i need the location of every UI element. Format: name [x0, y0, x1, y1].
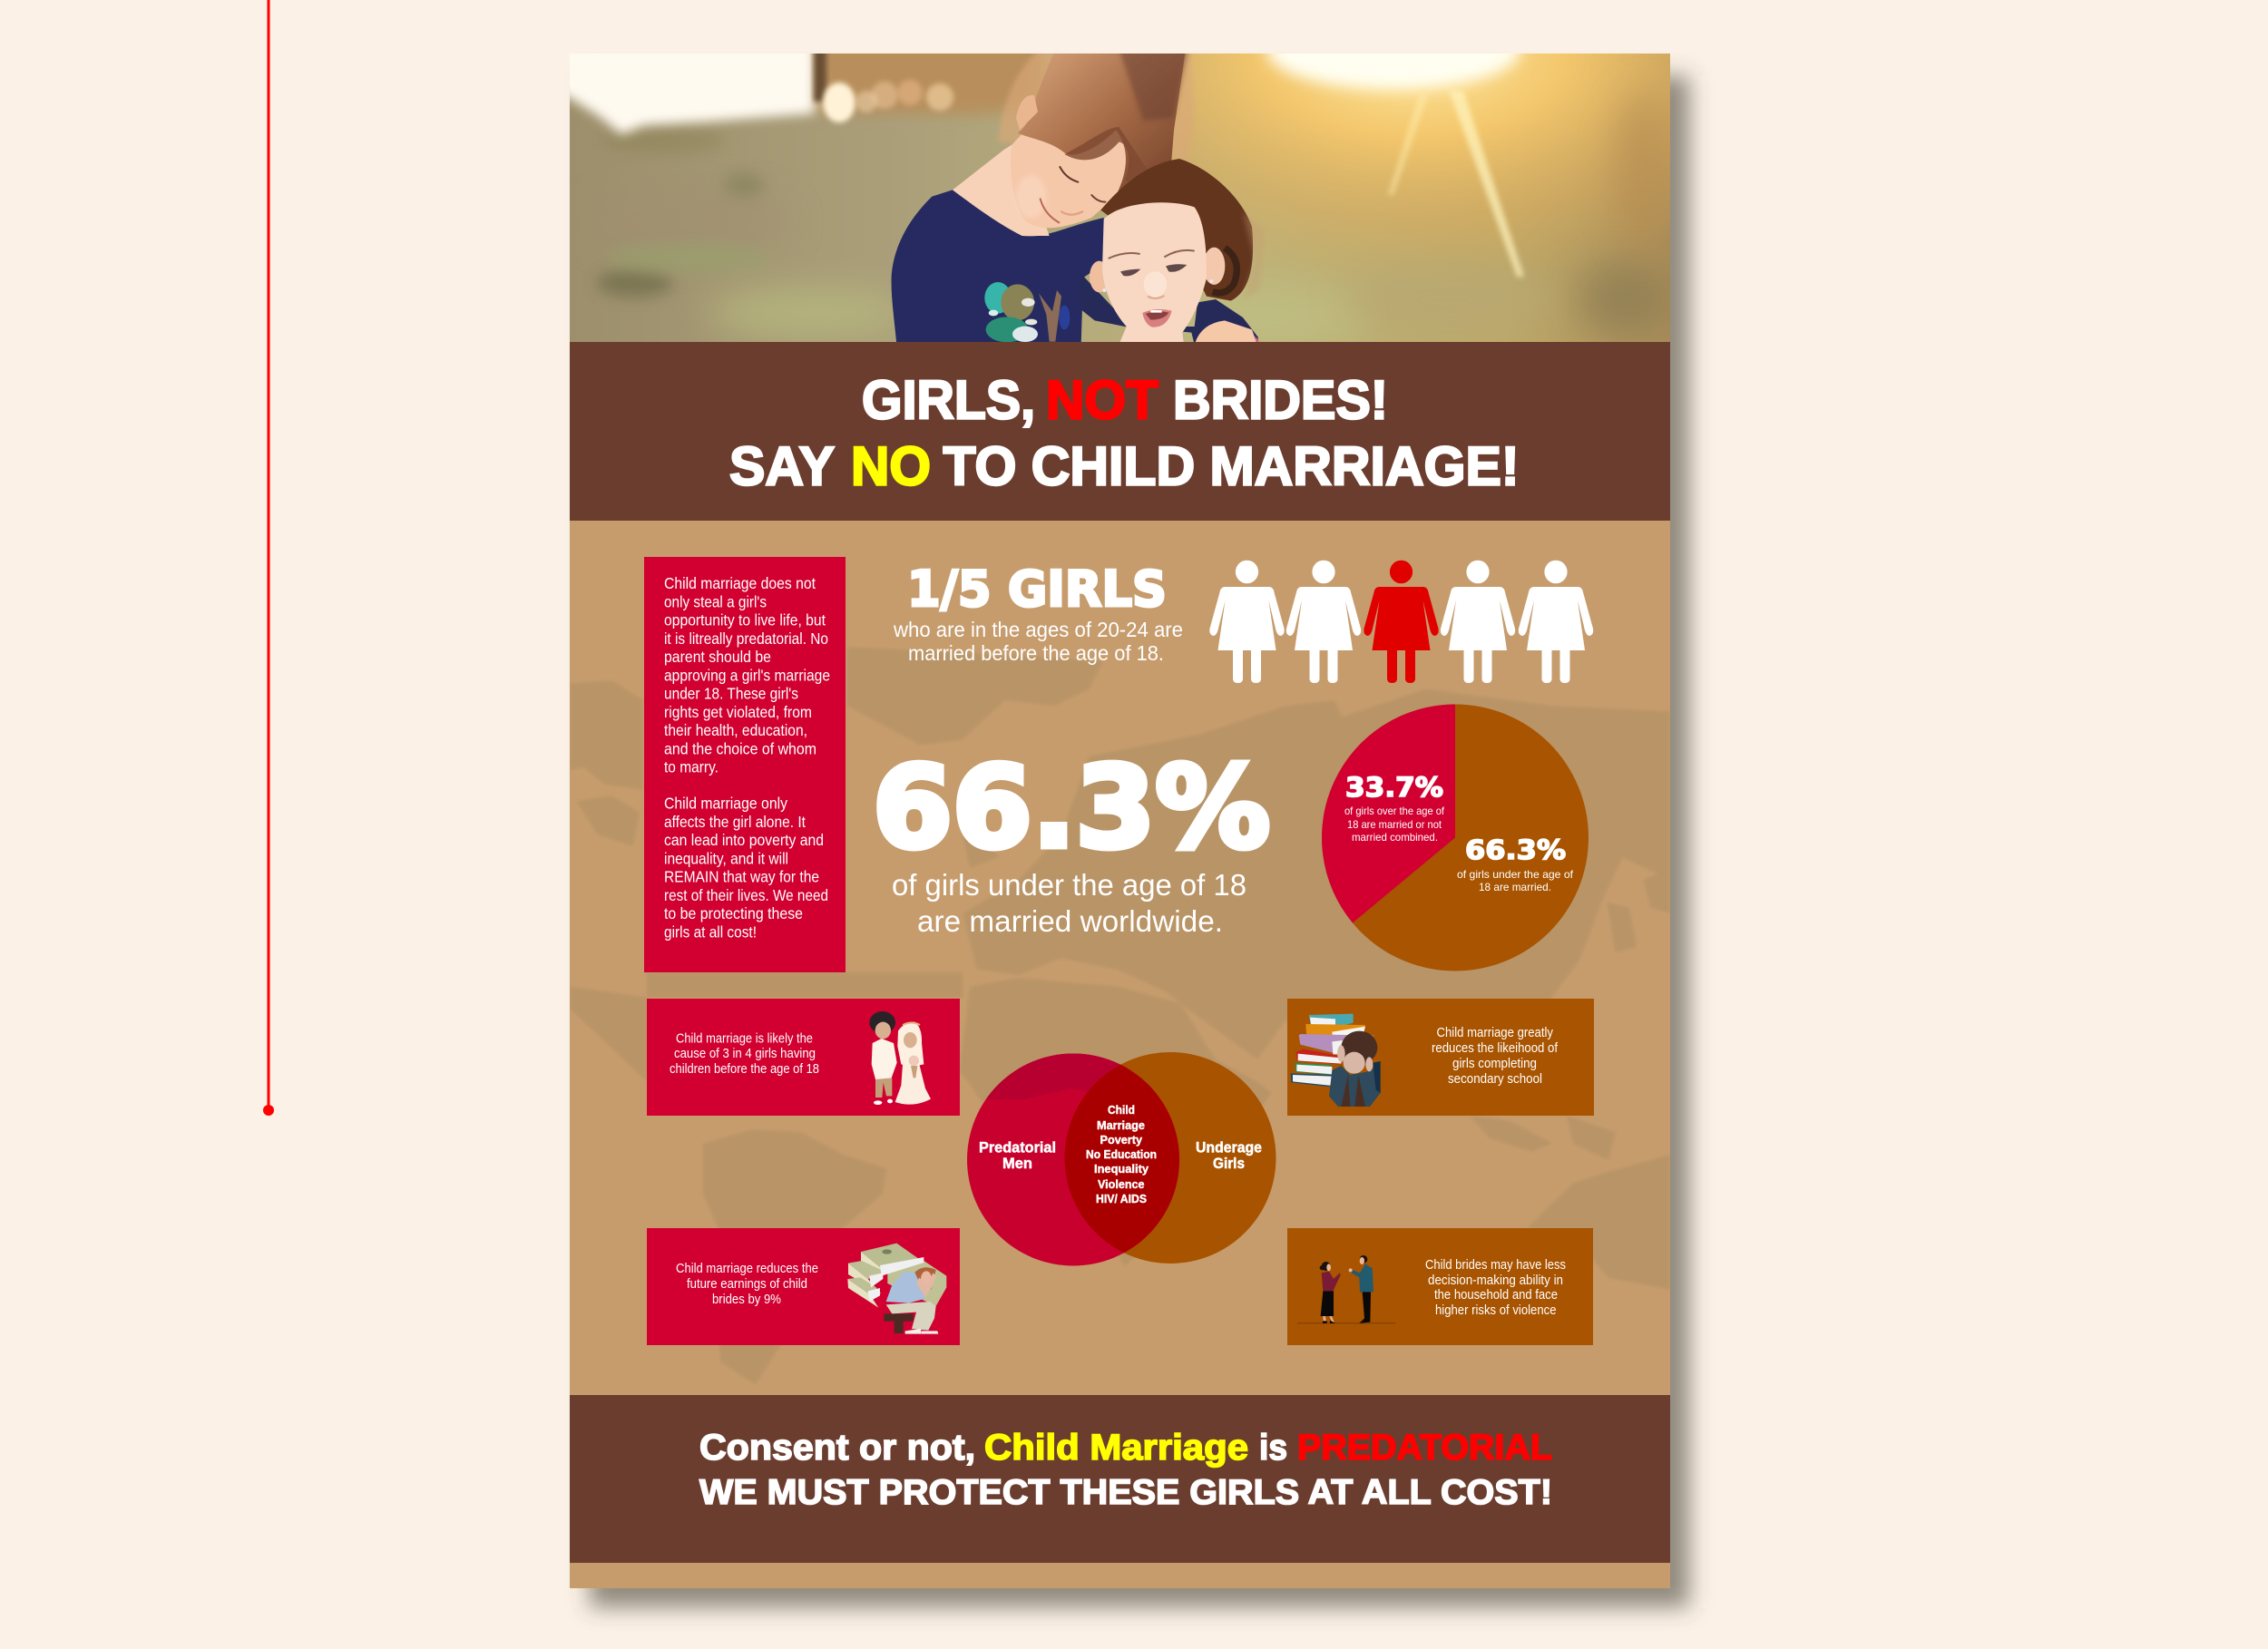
footer line 1: PREDATORIAL: [1297, 1428, 1552, 1468]
icon: man and woman arguing: [1297, 1255, 1395, 1323]
pie label 33.7%: married combined.: [1352, 831, 1438, 844]
venn label left: Predatorial: [979, 1139, 1056, 1156]
younger girl hair: [1100, 159, 1253, 301]
title line 1: [862, 370, 1388, 430]
card: future earnings: [647, 1228, 960, 1345]
photo subjects: girls, in detail coordinates: [892, 48, 1264, 345]
paragraph 1: it is litreally predatorial. No: [664, 629, 828, 648]
title line 2: TO CHILD MARRIAGE!: [943, 435, 1519, 497]
footer line 2: WE MUST PROTECT THESE GIRLS AT ALL COST!: [699, 1473, 1552, 1512]
paragraph 2: affects the girl alone. It: [664, 813, 806, 831]
card text: brides by 9%: [712, 1293, 781, 1307]
older girl arm around sister: [1080, 272, 1258, 345]
card text: decision-making ability in: [1428, 1273, 1563, 1288]
venn overlap list: Inequality: [1094, 1163, 1149, 1176]
title line 2: NO: [851, 435, 931, 497]
pie label 33.7%: 33.7%: [1345, 772, 1443, 803]
card: children before 18: [647, 999, 960, 1116]
photo background light and grass: [570, 54, 1670, 342]
card text: future earnings of child: [687, 1277, 807, 1292]
card: secondary school: [1287, 999, 1594, 1116]
paragraph 1: and the choice of whom: [664, 739, 816, 757]
paragraph 2: Child marriage only: [664, 795, 787, 813]
poster: [570, 54, 1670, 1588]
panel: tan poster background: [570, 54, 1670, 1588]
paragraph 1: to marry.: [664, 758, 719, 776]
footer banner: [570, 1395, 1670, 1563]
paragraph 2: inequality, and it will: [664, 849, 788, 867]
paragraph 1: opportunity to live life, but: [664, 611, 826, 629]
venn overlap list: Marriage: [1097, 1119, 1145, 1132]
pie label 66.3%: 18 are married.: [1479, 881, 1551, 893]
footer line 1: is: [1259, 1428, 1287, 1468]
venn label left: Men: [1002, 1155, 1032, 1172]
venn overlap list: [1086, 1104, 1157, 1205]
pie label 66.3%: of girls under the age of: [1457, 868, 1574, 881]
big number description: are married worldwide.: [917, 904, 1223, 938]
sequin butterfly: [984, 282, 1070, 342]
younger girl ears: [1090, 261, 1106, 292]
title line 1: BRIDES!: [1173, 370, 1388, 430]
icon: five women, one highlighted red: [1209, 561, 1593, 683]
title line 1: GIRLS,: [862, 370, 1035, 430]
card text: secondary school: [1448, 1072, 1542, 1087]
footer line 1: [699, 1428, 1552, 1468]
paragraph 1: parent should be: [664, 648, 771, 666]
paragraph 2: to be protecting these: [664, 904, 803, 922]
pie label 33.7%: of girls over the age of: [1344, 805, 1445, 817]
card text: [1432, 1026, 1559, 1087]
paragraph 2: can lead into poverty and: [664, 831, 824, 849]
pie label 66.3%: 66.3%: [1465, 834, 1566, 865]
venn overlap list: Poverty: [1100, 1134, 1142, 1146]
icon: woman sitting with money stacks: [847, 1244, 946, 1334]
card text: children before the age of 18: [670, 1062, 819, 1077]
card text: Child marriage greatly: [1437, 1026, 1554, 1040]
pie label 33.7%: [1344, 772, 1445, 844]
venn overlap: [1065, 1065, 1179, 1253]
older girl face: [1011, 115, 1155, 228]
icon: child bride and groom: [869, 1011, 931, 1105]
stat: 1/5 girls heading: 1/5 GIRLS: [907, 561, 1167, 618]
venn overlap list: Child: [1108, 1104, 1135, 1117]
paragraph 2: [664, 795, 828, 942]
paragraph 2: rest of their lives. We need: [664, 886, 828, 904]
paragraph 1: their health, education,: [664, 721, 807, 739]
stat: 1/5 description: who are in the ages of 20-24 are: [893, 618, 1183, 641]
younger girl features: [1102, 250, 1213, 327]
older girl ear: [1016, 95, 1038, 130]
card text: [1425, 1258, 1566, 1318]
card text: cause of 3 in 4 girls having: [674, 1047, 816, 1061]
card text: Child brides may have less: [1425, 1258, 1566, 1273]
card text: girls completing: [1452, 1057, 1537, 1071]
footer line 1: Child Marriage: [984, 1428, 1248, 1468]
venn overlap list: Violence: [1098, 1178, 1145, 1191]
photo: two girls in sunset field: [570, 54, 1670, 342]
card text: reduces the likeihood of: [1432, 1041, 1559, 1056]
card text: [676, 1262, 818, 1307]
paragraph 1: approving a girl's marriage: [664, 666, 830, 684]
big number description: of girls under the age of 18: [892, 868, 1246, 902]
footer line 1: Consent or not,: [699, 1428, 975, 1468]
venn diagram: [967, 1052, 1276, 1266]
paragraph 2: REMAIN that way for the: [664, 868, 819, 886]
venn label right: Underage: [1196, 1139, 1262, 1156]
title banner: [570, 342, 1670, 521]
venn overlap list: HIV/ AIDS: [1096, 1193, 1147, 1205]
pie label 33.7%: 18 are married or not: [1347, 818, 1442, 831]
stat: 1/5 description: [893, 618, 1183, 665]
pie chart: [1322, 704, 1589, 971]
panel: left text: [644, 557, 846, 972]
venn label right: [1196, 1139, 1262, 1172]
older girl hair halo: [998, 48, 1195, 161]
red timeline line with end dot: [263, 0, 274, 1116]
venn label left: [979, 1139, 1056, 1172]
paragraph 2: girls at all cost!: [664, 923, 757, 942]
card text: higher risks of violence: [1435, 1303, 1557, 1318]
card text: the household and face: [1434, 1288, 1558, 1303]
card text: Child marriage reduces the: [676, 1262, 818, 1276]
icon: stressed girl with books: [1291, 1014, 1381, 1107]
poster drop shadow: [590, 76, 1689, 1607]
older girl navy sweater: [892, 190, 1110, 345]
stat: 1/5 description: married before the age of 18.: [908, 641, 1164, 665]
venn overlap list: No Education: [1086, 1148, 1157, 1161]
paragraph 1: rights get violated, from: [664, 703, 812, 721]
big number 66.3%: 66.3%: [873, 743, 1270, 873]
pie label 66.3%: [1457, 834, 1574, 893]
title line 1: NOT: [1046, 370, 1158, 430]
older girl neck: [953, 142, 1050, 236]
older girl eyes and smile: [1041, 167, 1105, 222]
card text: [670, 1031, 819, 1077]
card text: Child marriage is likely the: [676, 1031, 813, 1046]
paragraph 1: only steal a girl's: [664, 592, 767, 610]
venn label right: Girls: [1213, 1155, 1245, 1172]
younger girl face: [1102, 202, 1207, 345]
paragraph 1: [664, 574, 830, 776]
big number description: [892, 868, 1246, 938]
card: decision-making: [1287, 1228, 1593, 1345]
older girl hair: [1018, 52, 1186, 204]
paragraph 1: Child marriage does not: [664, 574, 816, 592]
paragraph 1: under 18. These girl's: [664, 685, 798, 703]
older girl hand: [1196, 320, 1256, 342]
world map background: [570, 647, 1670, 1385]
title line 2: SAY: [729, 435, 835, 497]
